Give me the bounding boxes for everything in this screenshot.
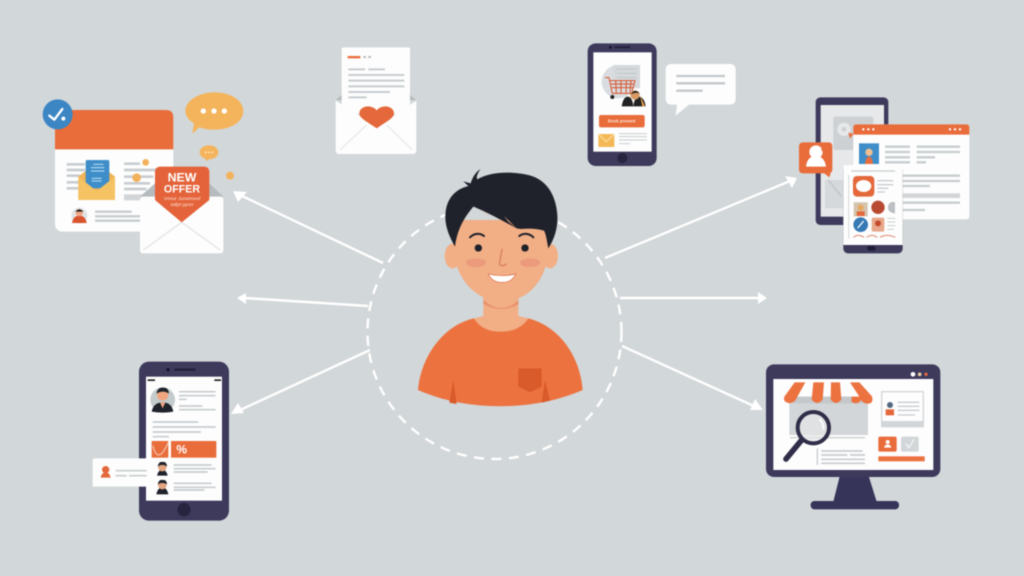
user tile <box>878 437 897 452</box>
tablet and browser cluster <box>799 97 969 253</box>
browser window <box>853 124 969 219</box>
icon: love letter envelope <box>336 47 416 154</box>
decorative dots <box>132 159 234 182</box>
new offer envelope: tallpt ppvn <box>171 202 194 208</box>
tablet <box>816 97 888 225</box>
shirt folds <box>449 380 550 404</box>
icon: mail <box>598 134 614 147</box>
awning <box>784 382 872 404</box>
button: Book present <box>608 119 636 124</box>
phone profile cluster <box>93 362 229 521</box>
cheeks <box>466 258 540 267</box>
nose <box>499 249 506 266</box>
pocket <box>518 368 542 392</box>
new offer envelope: Vmoz Jurwinsed <box>164 196 201 202</box>
neck <box>474 293 528 332</box>
profile avatar <box>150 387 175 413</box>
dashed circle around customer <box>368 205 622 459</box>
orange bar <box>878 456 925 461</box>
phone body <box>139 362 229 521</box>
icon grid <box>853 201 895 237</box>
new offer envelope: OFFER <box>164 183 200 195</box>
profile card <box>882 392 923 427</box>
monitor <box>766 364 940 509</box>
arrow: to tablet cluster <box>605 176 797 258</box>
arrow: to phone profile <box>231 350 370 414</box>
icon: yellow envelope with blue letter <box>78 160 115 200</box>
text lines under shop <box>817 448 865 465</box>
ears <box>445 244 558 268</box>
shop building <box>789 397 868 438</box>
new offer envelope <box>140 167 223 253</box>
eyebrows and eyes <box>470 234 533 252</box>
contact row one <box>157 462 216 476</box>
new offer envelope: NEW <box>168 171 197 185</box>
love letter and shopping phone cluster <box>336 43 736 166</box>
hair <box>445 169 557 248</box>
shoppers <box>622 90 646 106</box>
icon: orange profile bubble <box>799 142 832 177</box>
customer figure <box>418 169 583 406</box>
document card <box>55 110 173 232</box>
storefront monitor cluster <box>766 364 940 509</box>
face <box>455 220 548 302</box>
icon: small speech bubble <box>200 145 218 161</box>
content lines <box>153 392 216 437</box>
arrow: to storefront monitor <box>622 346 763 410</box>
smile <box>488 274 516 282</box>
icon: shopping cart <box>605 78 635 93</box>
phone: shopping cart <box>588 43 657 166</box>
icon: magnifying glass <box>786 412 829 459</box>
arrow: to right blank <box>620 292 767 304</box>
check tile <box>901 437 919 452</box>
discount banner: % <box>176 443 187 457</box>
white profile chip <box>93 458 149 487</box>
contact row two <box>156 480 216 494</box>
email campaign cluster <box>43 92 243 253</box>
arrow: to email cluster <box>233 191 383 263</box>
icon: large speech bubble <box>185 92 243 134</box>
white speech bubble <box>666 64 736 116</box>
discount banner <box>152 441 216 458</box>
shirt <box>418 318 583 406</box>
phone with icon grid <box>843 165 903 253</box>
icon: chat tile <box>853 176 874 197</box>
arrow: to left blank <box>237 293 368 306</box>
icon: blue check badge <box>43 99 73 129</box>
